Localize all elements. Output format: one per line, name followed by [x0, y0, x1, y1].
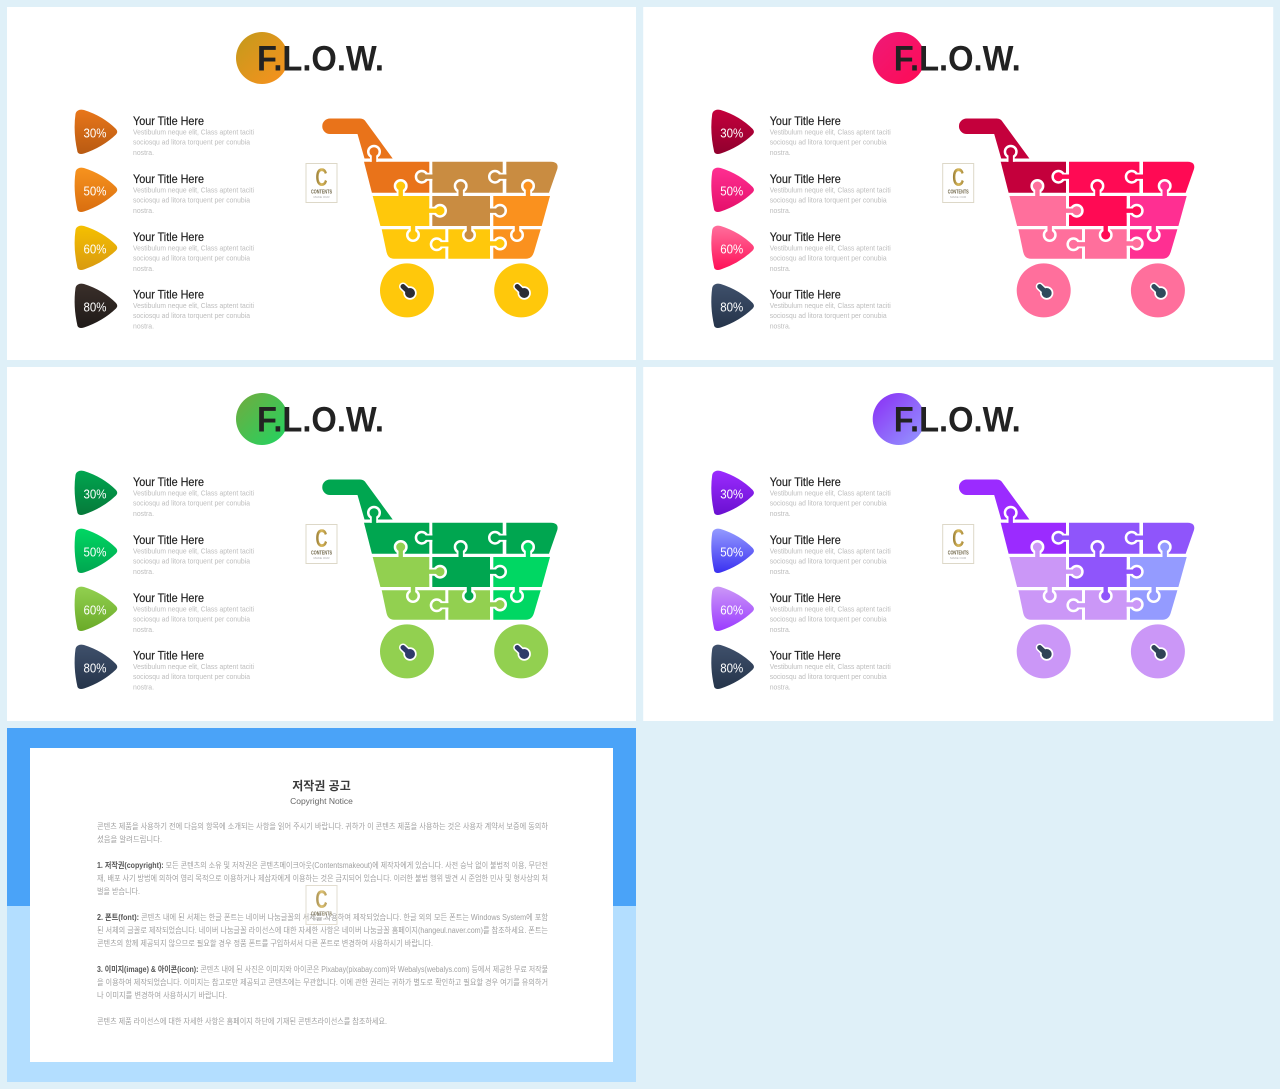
list item: 30%: nostra. — [770, 148, 791, 157]
list item: 60%: nostra. — [770, 625, 791, 634]
list item: 60%: Vestibulum neque elit, Class aptent taciti — [133, 604, 254, 614]
list item: 60%: Your Title Here — [770, 230, 841, 244]
list item: 30%: nostra. — [133, 148, 154, 157]
heading — [236, 32, 384, 84]
wheel: right — [1131, 624, 1185, 678]
list item: 50%: sociosqu ad litora torquent per conubia — [770, 557, 887, 566]
list item: 30%: sociosqu ad litora torquent per conubia — [133, 138, 251, 147]
heading — [873, 393, 1021, 445]
list item: 30% — [711, 471, 891, 518]
list item: 30%: 30% — [84, 486, 107, 502]
list item: 30%: Your Title Here — [133, 114, 204, 128]
list item: 80%: nostra. — [770, 322, 791, 330]
list item: 60%: 60% — [84, 242, 107, 256]
notice body text: 나 이미지를 변경하여 사용하시기 바랍니다. — [97, 990, 227, 1000]
list item: 50%: Vestibulum neque elit, Class aptent taciti — [133, 186, 254, 194]
list item: 50%: 50% — [84, 544, 107, 560]
list item: 50%: sociosqu ad litora torquent per conubia — [770, 196, 887, 205]
list item: 30% — [75, 471, 254, 518]
logo: C — [316, 164, 328, 192]
list item: 60%: Your Title Here — [770, 591, 841, 605]
wheel: right — [1131, 263, 1185, 317]
list item: 30%: nostra. — [133, 509, 154, 518]
shopping cart puzzle — [959, 118, 1194, 317]
logo: MAKE OUR — [313, 195, 330, 199]
list item: 30%: Your Title Here — [770, 475, 841, 489]
heading — [236, 393, 384, 445]
list item: 80%: 80% — [84, 300, 107, 314]
list item: 30%: Vestibulum neque elit, Class aptent taciti — [770, 128, 891, 136]
wheel: right — [494, 624, 548, 678]
list item: 60%: Your Title Here — [133, 591, 204, 605]
list item: 60%: 60% — [84, 602, 107, 618]
list item: 60%: Your Title Here — [133, 230, 204, 244]
list item: 60%: 60% — [720, 602, 744, 618]
panel: pink flow cart — [643, 7, 1273, 360]
wheel: left — [1017, 624, 1071, 678]
list item: 50%: nostra. — [770, 206, 791, 215]
logo: CONTENTS — [948, 550, 969, 556]
list item: 60%: nostra. — [770, 264, 791, 273]
logo: C — [316, 525, 328, 553]
heading: F.L.O.W. — [894, 400, 1021, 440]
list item: 30%: sociosqu ad litora torquent per conubia — [133, 499, 251, 508]
list item: 50%: nostra. — [133, 567, 154, 576]
notice subtitle: Copyright Notice — [290, 796, 353, 806]
logo — [943, 524, 974, 564]
logo: C — [952, 525, 964, 553]
logo: CONTENTS — [311, 912, 333, 918]
notice body text: 된 서체의 글꼴로 제작되었습니다. 네이버 나눔글꼴 라이선스에 대한 자세한 사항은 네이버 나눔글꼴 홈페이지(hangeul.naver.com)를 참조하세요. 폰트는 — [97, 925, 548, 935]
list item: 30%: Vestibulum neque elit, Class aptent taciti — [133, 128, 254, 136]
wheel: left — [380, 263, 434, 317]
list item: 50%: Your Title Here — [770, 172, 841, 186]
list item: 80%: Your Title Here — [770, 288, 841, 302]
list item: 60%: sociosqu ad litora torquent per conubia — [133, 615, 251, 624]
list item: 80%: Your Title Here — [133, 288, 204, 302]
list item: 60%: 60% — [720, 242, 744, 256]
list item: 50%: Your Title Here — [770, 533, 841, 547]
list item: 80%: sociosqu ad litora torquent per conubia — [770, 672, 887, 681]
list item: 80% — [75, 284, 254, 330]
list item: 30%: 30% — [720, 486, 744, 502]
list item: 60%: Vestibulum neque elit, Class aptent taciti — [770, 244, 891, 252]
list item: 80%: Vestibulum neque elit, Class aptent taciti — [133, 662, 254, 671]
notice body text: 콘텐츠 제품 라이선스에 대한 자세한 사항은 홈페이지 하단에 기재된 콘텐츠라이선스를 참조하세요. — [97, 1016, 387, 1026]
list item: 30%: 30% — [84, 126, 107, 140]
notice body text: 1. 저작권(copyright): 모든 콘텐츠의 소유 및 저작권은 콘텐츠메이크아웃(Contentsmakeout)에 제작자에게 있습니다. 사전 승낙 없이 불법적 이용, 무단전 — [97, 860, 548, 870]
list item: 80%: Your Title Here — [770, 648, 841, 662]
logo: MAKE OUR — [950, 195, 967, 199]
list item: 80% — [711, 284, 891, 330]
logo: MAKE OUR — [950, 556, 967, 560]
logo: MAKE OUR — [313, 556, 330, 560]
list item: 50%: nostra. — [770, 567, 791, 576]
panel: purple flow cart — [643, 367, 1273, 721]
list item: 50% — [711, 529, 891, 576]
list item: 60% — [711, 226, 891, 273]
panel: orange flow cart — [7, 7, 636, 360]
list item: 60% — [75, 587, 254, 634]
list item: 50%: Your Title Here — [133, 533, 204, 547]
list item: 60% — [711, 587, 891, 634]
list item: 50%: Vestibulum neque elit, Class aptent taciti — [770, 546, 891, 556]
list item: 80%: sociosqu ad litora torquent per conubia — [133, 672, 251, 681]
list item: 30%: Your Title Here — [770, 114, 841, 128]
notice body text: 3. 이미지(image) & 아이콘(icon): 콘텐츠 내에 된 사진은 이미지와 아이콘은 Pixabay(pixabay.com)와 Webalys(webalys.com) 등에서 제공한 무료 저작물 — [97, 964, 548, 974]
list item: 60%: Vestibulum neque elit, Class aptent taciti — [133, 244, 254, 252]
heading: F.L.O.W. — [257, 400, 384, 440]
list item: 50%: Vestibulum neque elit, Class aptent taciti — [133, 546, 254, 556]
list item: 30%: nostra. — [770, 509, 791, 518]
list item: 50% — [711, 168, 891, 215]
list item: 50%: Your Title Here — [133, 172, 204, 186]
list item: 50% — [75, 168, 254, 215]
list item: 30%: sociosqu ad litora torquent per conubia — [770, 499, 887, 508]
list item: 80%: Vestibulum neque elit, Class aptent taciti — [770, 662, 891, 671]
list item: 80%: 80% — [720, 300, 744, 314]
list item: 50%: sociosqu ad litora torquent per conubia — [133, 557, 251, 566]
notice body text: 재, 배포 사기 방법에 의하여 영리 목적으로 이용하거나 제삼자에게 이용하는 것은 금지되어 있습니다. 이러한 불법 행위 발견 시 준엄한 민사 및 형사상의 처 — [97, 873, 548, 883]
list item: 80%: sociosqu ad litora torquent per conubia — [770, 311, 887, 320]
notice body text: 셨음을 알려드립니다. — [97, 834, 162, 844]
notice title: 저작권 공고 — [292, 778, 351, 793]
shopping cart puzzle — [959, 480, 1194, 678]
wheel: right — [494, 263, 548, 317]
notice body text: 을 이용하여 제작되었습니다. 이미지는 참고로만 제공되고 콘텐츠에는 무관합니다. 이에 관한 권리는 귀하가 별도로 확인하고 필요할 경우 여기를 유의하거 — [97, 977, 548, 987]
logo — [943, 164, 974, 202]
list item: 80%: nostra. — [133, 682, 154, 692]
notice body text: 벌을 받습니다. — [97, 886, 140, 896]
panel: green flow cart — [7, 367, 636, 721]
list item: 60%: sociosqu ad litora torquent per conubia — [770, 254, 887, 263]
list item: 30% — [75, 110, 254, 157]
list item: 30% — [711, 110, 891, 157]
logo: C — [952, 164, 964, 192]
list item: 60% — [75, 226, 254, 273]
list item: 50%: 50% — [84, 184, 107, 198]
shopping cart puzzle — [322, 480, 558, 678]
list item: 80%: 80% — [720, 660, 744, 676]
list item: 30%: sociosqu ad litora torquent per conubia — [770, 138, 887, 147]
logo: CONTENTS — [311, 550, 333, 556]
list item: 60%: Vestibulum neque elit, Class aptent taciti — [770, 604, 891, 614]
logo — [306, 886, 337, 924]
notice body text — [97, 821, 549, 1026]
wheel: left — [1017, 263, 1071, 317]
list item: 80%: Vestibulum neque elit, Class aptent taciti — [133, 301, 254, 310]
list item: 60%: sociosqu ad litora torquent per conubia — [133, 254, 251, 263]
heading: F.L.O.W. — [257, 40, 384, 78]
shopping cart puzzle — [322, 118, 558, 317]
list item: 30%: Vestibulum neque elit, Class aptent taciti — [133, 488, 254, 498]
list item: 50%: Vestibulum neque elit, Class aptent taciti — [770, 186, 891, 194]
logo: CONTENTS — [311, 190, 333, 196]
list item: 30%: Your Title Here — [133, 475, 204, 489]
list item: 50%: nostra. — [133, 206, 154, 215]
notice body text: 2. 폰트(font): 콘텐츠 내에 된 서체는 한글 폰트는 네이버 나눔글꼴의 서체를 사용하여 제작되었습니다. 한글 외의 모든 폰트는 Windows System에 포함 — [97, 912, 549, 922]
list item: 60%: nostra. — [133, 264, 154, 273]
list item: 50%: 50% — [720, 184, 744, 198]
list item: 80%: nostra. — [770, 682, 791, 692]
list item: 80%: Your Title Here — [133, 648, 204, 662]
logo: C — [316, 886, 328, 914]
notice body text: 콘텐츠 제품을 사용하기 전에 다음의 항목에 소개되는 사항을 읽어 주시기 바랍니다. 귀하가 이 콘텐츠 제품을 사용하는 것은 사용자 계약서 보증에 동의하 — [97, 821, 549, 831]
list item: 60%: nostra. — [133, 625, 154, 634]
list item: 30%: 30% — [720, 126, 744, 140]
list item: 30%: Vestibulum neque elit, Class aptent taciti — [770, 488, 891, 498]
logo — [306, 524, 337, 564]
logo: MAKE OUR — [313, 917, 330, 921]
list item: 50%: 50% — [720, 544, 744, 560]
logo: CONTENTS — [948, 190, 969, 196]
list item: 80%: Vestibulum neque elit, Class aptent taciti — [770, 301, 891, 310]
list item: 80% — [711, 645, 891, 692]
logo — [306, 164, 337, 202]
list item: 80%: sociosqu ad litora torquent per conubia — [133, 311, 251, 320]
heading: F.L.O.W. — [894, 40, 1021, 78]
list item: 50% — [75, 529, 254, 576]
panel: copyright notice — [7, 728, 636, 1082]
heading — [873, 32, 1021, 84]
list item: 60%: sociosqu ad litora torquent per conubia — [770, 615, 887, 624]
list item: 80%: 80% — [84, 660, 107, 676]
list item: 50%: sociosqu ad litora torquent per conubia — [133, 196, 251, 205]
notice body text: 콘텐츠의 함께 제공되지 않으므로 필요할 경우 정품 폰트를 구입하셔서 다른 폰트로 변경하여 사용하시기 바랍니다. — [97, 938, 433, 948]
list item: 80% — [75, 645, 254, 692]
list item: 80%: nostra. — [133, 322, 154, 330]
wheel: left — [380, 624, 434, 678]
